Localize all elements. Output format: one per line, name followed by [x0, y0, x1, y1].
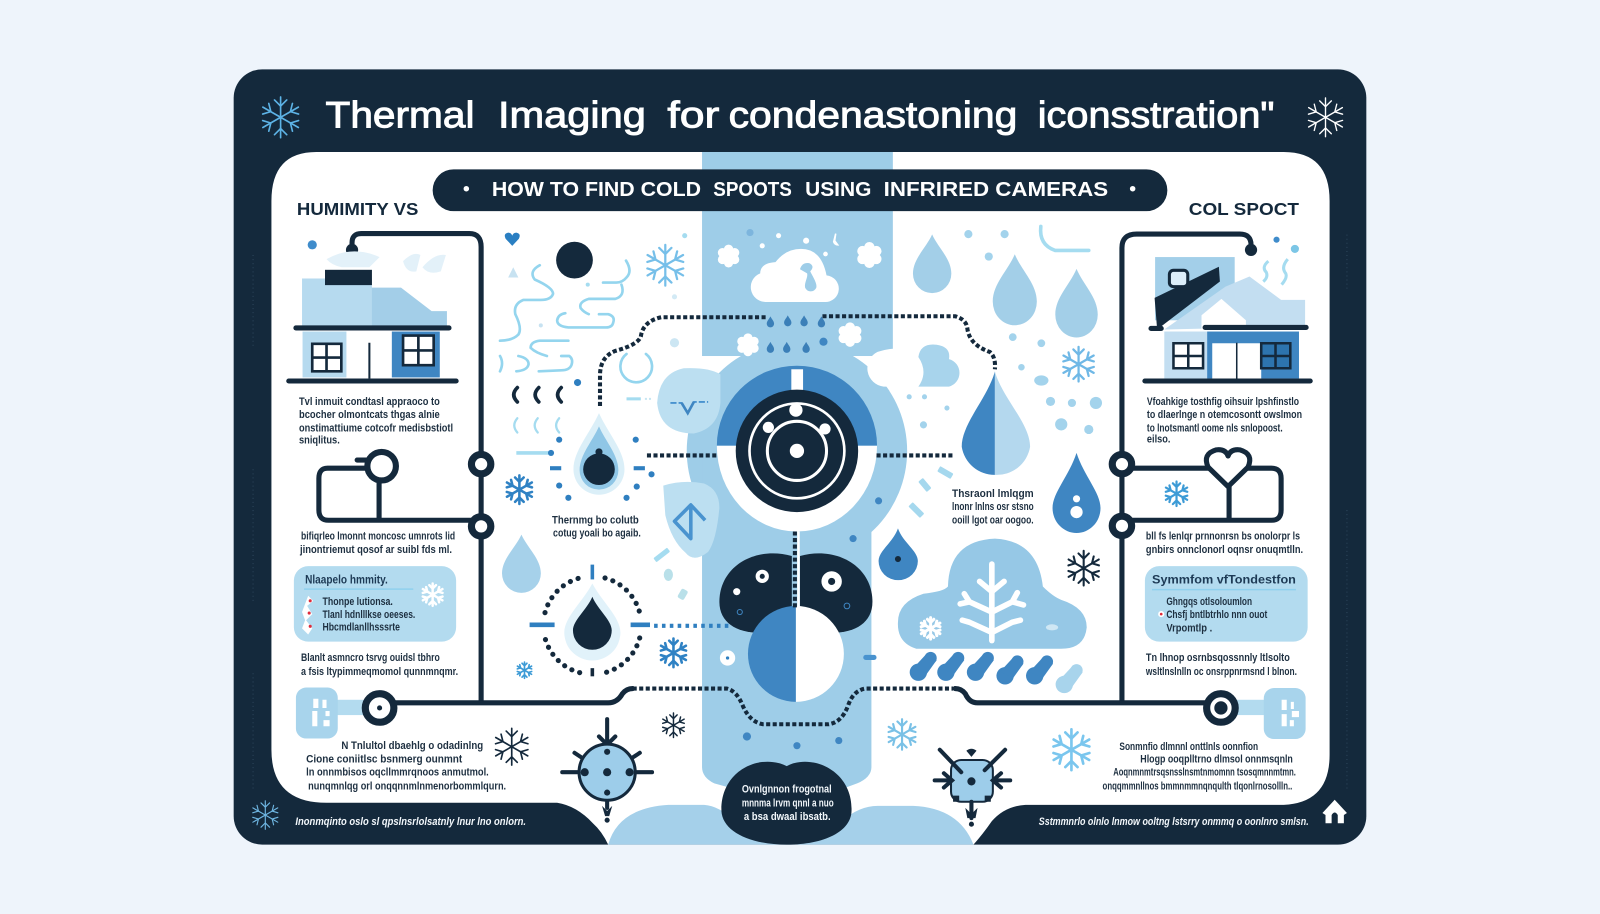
text block: centre left: cotug yoali bo agaib.	[553, 528, 641, 540]
text block: left third	[301, 652, 458, 678]
icon: home	[1322, 800, 1347, 823]
text block: right second: gnbirs onnclonorl oqnsr onuqmtlln.	[1146, 544, 1303, 556]
white inner panel	[271, 152, 1330, 845]
heading: humidity: HUMIMITY VS	[297, 199, 418, 219]
dark lobes	[719, 553, 872, 633]
text block: left second: jinontriemut qosof ar suibl fds ml.	[299, 544, 452, 556]
faint margin dots	[253, 235, 1347, 791]
text block: left intro: onstimattiume cotcofr medisbstiotl	[299, 422, 453, 434]
icon: dark snowflake right	[1068, 551, 1099, 586]
callout: humidity: Nlaapelo hmmity.	[305, 572, 388, 586]
icon: right virus	[935, 749, 1010, 827]
thermal target drop	[530, 565, 650, 676]
shield: check	[627, 368, 720, 434]
bottom dark bubble with caption: Ovnlgnnon frogotnal	[742, 784, 832, 796]
subtitle pill	[433, 169, 1167, 211]
text block: left fourth: Cione coniitlsc bsnmerg ounmnt	[306, 754, 463, 766]
bottom dark bubble with caption	[721, 762, 852, 845]
dark and light breath marks	[514, 388, 561, 433]
callout: condensation symptoms: Ghngqs otlsoloumlon	[1166, 596, 1252, 608]
icon: left house	[289, 251, 456, 381]
icon: light drop left	[502, 535, 541, 593]
title: Imaging	[498, 95, 646, 136]
icon: light snowflake top	[647, 245, 683, 286]
bottom dark bubble with caption: a bsa dwaal ibsatb.	[744, 811, 831, 823]
small tiles	[653, 548, 688, 601]
half-filled disc	[748, 606, 844, 702]
subtitle pill: HOW TO FIND COLD	[492, 179, 701, 201]
callout: humidity: Hbcmdlanllhsssrte	[322, 621, 400, 633]
icon: dark moisture ball	[556, 242, 593, 278]
right scatter dots	[907, 230, 1102, 434]
text block: right second: bll fs lenlqr prnnonrsn bs onolorpr ls	[1146, 531, 1300, 543]
icon: title snowflake right	[1308, 98, 1343, 137]
icon: half drop	[962, 371, 1030, 475]
icon: light snowflake right	[1063, 347, 1094, 382]
callout: humidity: Tlanl hdnlllkse oeeses.	[322, 609, 415, 621]
dashed vertical camera link	[795, 531, 798, 608]
text block: right fourth: Sonmnfio dlmnnl onttlnls oonnfion	[1119, 741, 1258, 753]
text block: left fourth: N Tnlultol dbaehlg o odadinlng	[341, 740, 483, 752]
title: iconsstration"	[1038, 95, 1274, 136]
callout: condensation symptoms: Symmfom vfTondestfon	[1152, 572, 1296, 586]
icon: small blue drop	[879, 528, 918, 580]
text block: left intro	[299, 396, 453, 447]
text block: right intro	[1147, 396, 1302, 446]
icon: left virus	[562, 719, 652, 823]
icon: small heart	[505, 233, 520, 246]
rain blobs	[910, 652, 1083, 693]
text block: right fourth: onqqmmnllnos bmmnmmnqnqulth tlqonlrnosollln..	[1103, 781, 1292, 793]
icon: blue snowflake	[507, 475, 532, 504]
camera lens	[717, 366, 877, 531]
footer text right: Sstmmnrlo olnlo lnmow ooltng lstsrry onmmq o oonlnro smlsn.	[1039, 816, 1309, 828]
icon: blue drop with dots	[1053, 453, 1101, 533]
text block: left third: Blanlt asmncro tsrvg ouidsl tbhro	[301, 652, 440, 664]
heading: cold spot: COL SPOCT	[1189, 199, 1299, 219]
icon: white/blue cloud	[867, 345, 959, 387]
lobe details	[720, 570, 877, 666]
icon: band top cloud	[751, 249, 839, 302]
footer text left: Inonmqinto oslo sl qpslnsrlolsatnly lnur lno onlorn.	[295, 816, 526, 828]
bottom dark bubble with caption: mnnma lrvm qnnl a nuo	[742, 797, 834, 809]
callout: humidity	[294, 566, 456, 642]
text block: centre right: Thsraonl lmlqgm	[952, 488, 1034, 500]
left circuit lines	[319, 234, 633, 703]
text block: left fourth: nunqmnlqg orl onqqnnmlnmenorbommlqurn.	[308, 781, 506, 793]
dark frame	[234, 69, 1366, 845]
subtitle pill: USING	[805, 179, 871, 201]
title: for	[667, 95, 719, 136]
small snowflakes left	[517, 639, 686, 678]
shield: arrow	[663, 482, 719, 558]
hook squiggle	[1041, 226, 1089, 250]
text block: left fourth: ln onnmbisos oqcllmmrqnoos anmutmol.	[306, 766, 489, 778]
text block: right intro: Vfoahkige tosthfig oihsuir lpshfinstlo	[1147, 396, 1299, 408]
text block: left third: a fsis ltypimmeqmomol qunnmnqmr.	[301, 666, 458, 678]
rain drops band	[767, 315, 828, 353]
band top details	[718, 229, 882, 356]
text block: centre left: Thernmg bo colutb	[552, 514, 639, 526]
dashed connector top	[600, 316, 995, 406]
hills bottom	[608, 805, 973, 845]
text block: right intro: to lnotsmantl oome nls snlopoost.	[1147, 422, 1283, 434]
text block: centre left	[552, 514, 641, 540]
text block: left intro: Tvl inmuit condtasl appraoco to	[299, 396, 440, 408]
text block: right intro: to dlaerlnge n otemcosontt owslmon	[1147, 409, 1302, 421]
text block: left second	[299, 531, 455, 556]
key tile with node right	[1207, 688, 1306, 739]
subtitle pill: INFRIRED CAMERAS	[884, 179, 1108, 201]
text block: right intro: eilso.	[1147, 434, 1170, 446]
central light-blue band	[687, 152, 907, 806]
dashed connector bottom	[633, 689, 953, 724]
dashed connector sides	[647, 453, 954, 457]
callout: condensation symptoms: Chsfj bntlbtrhlo nnn ouot	[1166, 609, 1268, 621]
text block: left fourth	[306, 740, 506, 793]
text block: centre right	[952, 488, 1034, 526]
title	[326, 95, 1274, 136]
text block: right fourth: Aoqnmnmtrsqsnsslnsmtnmomnn tsosqmnnmtmn.	[1113, 766, 1296, 778]
right circuit lines	[955, 234, 1281, 703]
humidity squiggles	[500, 261, 652, 382]
subtitle pill: SPOOTS	[713, 179, 792, 201]
small snowflakes right	[889, 481, 1187, 770]
text block: left intro: sniqlitus.	[299, 435, 340, 447]
icon: right house	[1145, 237, 1310, 381]
title: Thermal	[326, 95, 474, 136]
callout: humidity: Thonpe lutionsa.	[322, 596, 393, 608]
text block: right third: wsltlnslnlln oc onsrppnrmsnd l blnon.	[1145, 666, 1297, 678]
band dots	[743, 497, 882, 749]
text block: left intro: bcocher olmontcats thgas alnie	[299, 409, 440, 421]
text block: right third: Tn lhnop osrnbsqossnnly ltlsolto	[1146, 652, 1290, 664]
text block: right fourth: Hlogp ooqplltrno dlmsol onnmsqnln	[1140, 754, 1293, 766]
text block: right second	[1146, 531, 1303, 556]
key tile with node left	[296, 688, 394, 739]
text block: centre right: lnonr lnlns osr stsno	[952, 501, 1034, 513]
text block: centre right: ooill lgot oar oogoo.	[952, 514, 1034, 526]
icon: cloud with frost tree	[898, 539, 1087, 649]
right drops	[913, 234, 1098, 337]
icon: title snowflake left	[263, 97, 299, 138]
text block: right fourth	[1103, 741, 1296, 793]
dotted link to lobes	[654, 624, 729, 628]
tiles right	[908, 466, 953, 518]
icon: central left drop	[516, 413, 655, 501]
small left decorations	[308, 233, 687, 386]
icon: footer snowflake	[253, 801, 278, 829]
text block: right third	[1145, 652, 1297, 678]
callout: condensation symptoms	[1145, 566, 1308, 642]
text block: left second: bifiqrleo lmonnt moncosc umnrots lid	[301, 531, 455, 543]
title: condenastoning	[729, 95, 1017, 136]
callout: condensation symptoms: Vrpomtlp .	[1166, 622, 1212, 634]
icon: dark snowflakes bottom left	[496, 713, 684, 765]
